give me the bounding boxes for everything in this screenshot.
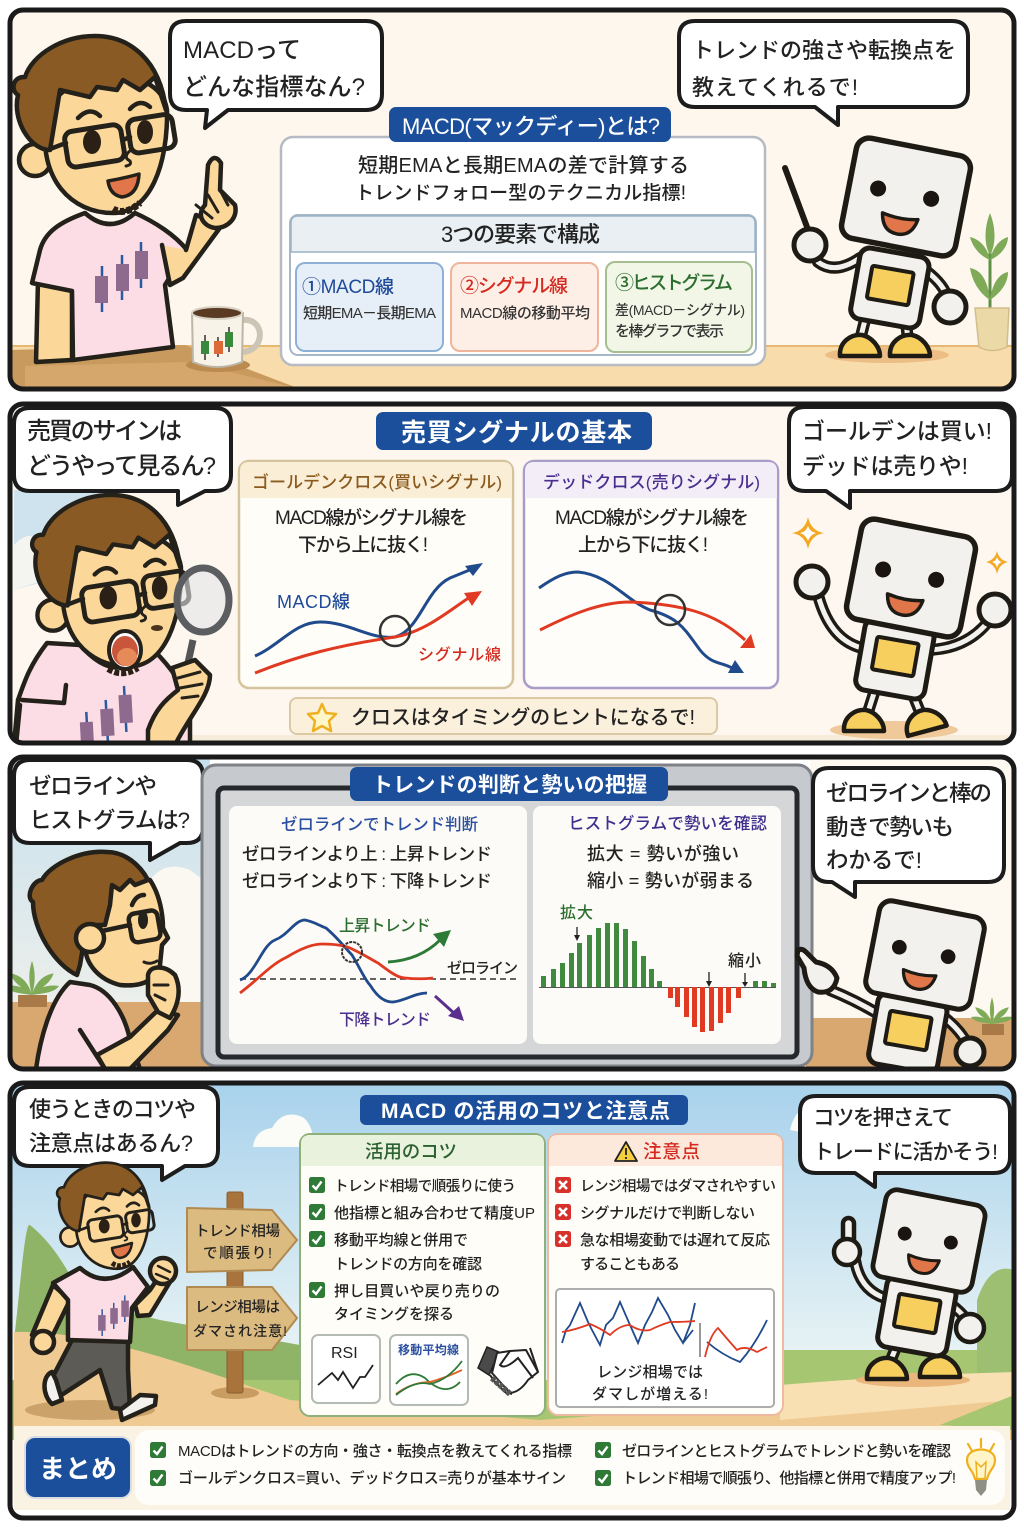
box: MACD line xyxy=(296,263,443,351)
panel: summary xyxy=(25,1430,1005,1505)
character: thinking man xyxy=(30,852,179,1069)
speech bubble: man xyxy=(14,408,231,505)
card: cautions xyxy=(548,1134,783,1415)
icon: light bulb xyxy=(967,1439,995,1496)
card: tips: 活用のコツ xyxy=(365,1141,457,1162)
icon: handshake xyxy=(478,1347,538,1394)
speech bubble: robot: トレンドの強さや転換点を xyxy=(692,38,956,63)
character: robot with pointer xyxy=(785,136,973,363)
speech bubble: robot: トレードに活かそう! xyxy=(813,1141,998,1164)
badge: summary xyxy=(25,1437,131,1498)
title: what is MACD xyxy=(389,107,671,142)
panel: summary: トレンド相場で順張り、他指標と併用で精度アップ! xyxy=(622,1470,956,1487)
title: signal basics: 売買シグナルの基本 xyxy=(401,418,632,447)
icon: warning xyxy=(615,1142,637,1161)
panel: histogram: 拡大 = 勢いが強い xyxy=(587,843,739,864)
mini chart: moving average: 移動平均線 xyxy=(398,1342,459,1357)
chart: zero line xyxy=(240,917,518,1029)
chart: histogram bars xyxy=(539,904,776,1032)
card: cautions: することもある xyxy=(580,1256,680,1273)
card: cautions: 注意点 xyxy=(643,1141,700,1162)
mini chart: RSI: RSI xyxy=(331,1345,358,1362)
speech bubble: robot xyxy=(789,407,1012,508)
panel 1: what is MACD xyxy=(10,10,1014,389)
speech bubble: robot xyxy=(679,21,968,125)
chart: zero line: 上昇トレンド xyxy=(339,917,431,935)
mini chart: whipsaw: ダマしが増える! xyxy=(592,1385,708,1403)
callout: crossover hint xyxy=(290,698,717,734)
speech bubble: robot: ゴールデンは買い! xyxy=(802,418,992,444)
box: histogram: 差(MACD－シグナル) xyxy=(615,302,745,318)
title: what is MACD: MACD(マックディー)とは? xyxy=(402,114,660,139)
signpost: で順張り! xyxy=(203,1245,272,1262)
panel: zero line: ゼロラインより下 : 下降トレンド xyxy=(242,871,492,891)
speech bubble: man: どうやって見るん? xyxy=(27,453,216,480)
signpost: レンジ相場は xyxy=(195,1299,280,1316)
title: tips and cautions xyxy=(360,1095,688,1125)
mini chart: RSI xyxy=(312,1335,380,1403)
speech bubble: man: MACDって xyxy=(183,37,301,64)
icon: candlestick mug xyxy=(186,307,260,372)
card: tips: タイミングを探る xyxy=(334,1306,454,1323)
card: cautions: シグナルだけで判断しない xyxy=(580,1205,755,1222)
plant xyxy=(970,213,1009,350)
chart: zero line: ゼロライン xyxy=(447,960,518,977)
box: signal line: MACD線の移動平均 xyxy=(460,305,590,322)
panel: summary: ゼロラインとヒストグラムでトレンドと勢いを確認 xyxy=(622,1443,951,1460)
card: golden cross: ゴールデンクロス(買いシグナル) xyxy=(252,472,502,492)
title: tips and cautions: MACD の活用のコツと注意点 xyxy=(381,1100,670,1123)
panel 3: trend and momentum xyxy=(5,757,1014,1075)
panel: summary: MACDはトレンドの方向・強さ・転換点を教えてくれる指標 xyxy=(178,1442,572,1460)
chart: histogram bars: 縮小 xyxy=(728,952,761,970)
icon: star xyxy=(308,704,336,731)
box: MACD line: ①MACD線 xyxy=(302,276,394,298)
card: dead cross: デッドクロス(売りシグナル) xyxy=(543,472,760,492)
badge: summary: まとめ xyxy=(39,1454,117,1484)
card: tips: トレンドの方向を確認 xyxy=(334,1256,482,1273)
speech bubble: robot: わかるで! xyxy=(826,848,922,873)
signpost: ダマされ注意! xyxy=(193,1323,287,1339)
panel 2: trading signals xyxy=(10,404,1014,758)
panel: histogram: ヒストグラムで勢いを確認 xyxy=(568,814,768,833)
box: histogram xyxy=(606,262,752,352)
speech bubble: robot: コツを押さえて xyxy=(813,1106,953,1130)
speech bubble: robot xyxy=(813,768,1004,897)
panel: zero line xyxy=(229,806,527,1044)
speech bubble: robot xyxy=(800,1096,1010,1187)
box: histogram: ③ヒストグラム xyxy=(615,272,733,294)
speech bubble: robot: ゼロラインと棒の xyxy=(826,781,992,806)
speech bubble: man: 注意点はあるん? xyxy=(29,1131,193,1156)
character: pointing robot xyxy=(797,899,986,1075)
card: tips: 他指標と組み合わせて精度UP xyxy=(334,1205,535,1222)
speech bubble: man xyxy=(14,760,203,860)
panel: histogram xyxy=(533,806,781,1044)
panel: zero line: ゼロラインでトレンド判断 xyxy=(281,815,478,834)
card: dead cross: 上から下に抜く! xyxy=(578,534,708,556)
speech bubble: man xyxy=(170,21,382,128)
character: walking man xyxy=(32,1163,176,1420)
mini chart: moving average xyxy=(390,1335,468,1405)
character: robot with finger up xyxy=(834,1188,987,1387)
box: signal line: ②シグナル線 xyxy=(460,275,568,297)
character: cheering robot xyxy=(792,517,1011,739)
speech bubble: man xyxy=(14,1087,218,1180)
speech bubble: man: 売買のサインは xyxy=(27,418,182,445)
mini chart: whipsaw xyxy=(556,1289,774,1407)
speech bubble: robot: デッドは売りや! xyxy=(802,453,968,479)
card: tips: 押し目買いや戻り売りの xyxy=(334,1283,500,1300)
icon: plant left xyxy=(12,961,59,1007)
card: dead cross: MACD線がシグナル線を xyxy=(555,507,749,529)
panel: histogram: 縮小 = 勢いが弱まる xyxy=(587,870,754,891)
card: MACD definition: トレンドフォロー型のテクニカル指標! xyxy=(355,182,686,204)
character: man with magnifying glass xyxy=(14,495,229,758)
monitor: trend and momentum xyxy=(202,765,812,1066)
icon: plant right xyxy=(971,997,1013,1035)
panel: summary: ゴールデンクロス=買い、デッドクロス=売りが基本サイン xyxy=(178,1469,566,1487)
card: MACD definition xyxy=(281,137,765,365)
character: pointing man xyxy=(14,36,236,362)
chart: histogram bars: 拡大 xyxy=(560,904,593,922)
card: golden cross: MACD線がシグナル線を xyxy=(275,507,468,529)
card: cautions: レンジ相場ではダマされやすい xyxy=(580,1177,776,1195)
title: signal basics xyxy=(376,412,652,450)
title: trend and momentum: トレンドの判断と勢いの把握 xyxy=(372,774,647,797)
chart: dead cross lines xyxy=(539,572,755,673)
speech bubble: man: 使うときのコツや xyxy=(29,1097,196,1122)
card: MACD definition: 短期EMAと長期EMAの差で計算する xyxy=(358,154,689,177)
card: dead cross xyxy=(524,461,778,688)
speech bubble: robot: 動きで勢いも xyxy=(826,815,954,840)
panel 4: tips and cautions xyxy=(10,1083,1014,1518)
card: tips: トレンド相場で順張りに使う xyxy=(334,1178,516,1195)
callout: crossover hint: クロスはタイミングのヒントになるで! xyxy=(351,706,695,729)
speech bubble: man: ゼロラインや xyxy=(29,774,157,799)
speech bubble: man: どんな指標なん? xyxy=(183,74,365,101)
signpost xyxy=(187,1192,297,1399)
speech bubble: robot: 教えてくれるで! xyxy=(692,75,858,100)
box: MACD line: 短期EMA－長期EMA xyxy=(303,305,436,322)
chart: golden cross lines: シグナル線 xyxy=(418,646,501,664)
mini chart: whipsaw: レンジ相場では xyxy=(597,1364,703,1381)
card: golden cross xyxy=(239,461,513,688)
card: golden cross: 下から上に抜く! xyxy=(298,534,428,556)
box: signal line xyxy=(451,263,598,351)
card: tips xyxy=(300,1134,545,1416)
title: trend and momentum xyxy=(350,767,668,801)
chart: golden cross lines: MACD線 xyxy=(277,592,350,612)
panel: three components: 3つの要素で構成 xyxy=(441,222,600,247)
chart: golden cross lines xyxy=(255,563,501,673)
card: tips: 移動平均線と併用で xyxy=(334,1232,468,1249)
signpost: トレンド相場 xyxy=(195,1223,280,1240)
chart: zero line: 下降トレンド xyxy=(339,1011,431,1029)
panel: zero line: ゼロラインより上 : 上昇トレンド xyxy=(242,844,492,864)
speech bubble: man: ヒストグラムは? xyxy=(29,808,190,833)
card: cautions: 急な相場変動では遅れて反応 xyxy=(580,1231,770,1249)
box: histogram: を棒グラフで表示 xyxy=(615,322,724,340)
panel: three components xyxy=(290,215,756,355)
